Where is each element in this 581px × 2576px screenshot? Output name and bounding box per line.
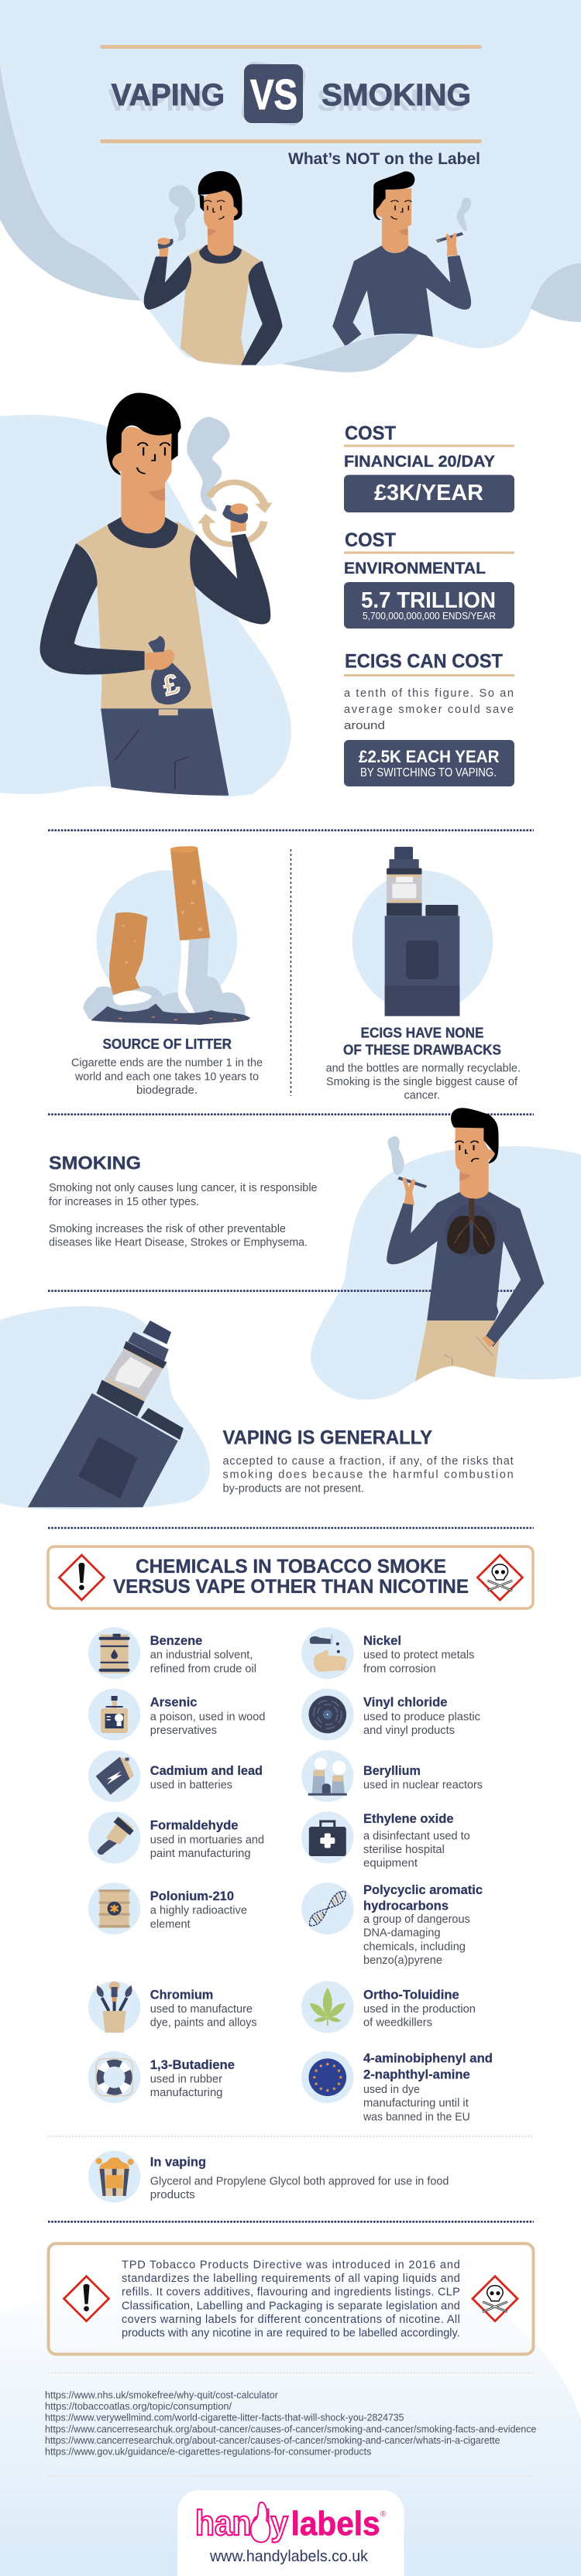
icon: skull hazard bbox=[477, 1555, 522, 1600]
text: vaping risks: by-products are not present. bbox=[223, 1482, 364, 1495]
item: 1,3-butadiene: manufacturing bbox=[150, 2087, 222, 2099]
icon: recycle arrows bbox=[198, 482, 273, 544]
text: TPD: TPD Tobacco Products Directive was introduced in 2016 and bbox=[122, 2259, 460, 2271]
item: 4-aminobiphenyl and 2-naphthyl-amine: was banned in the EU bbox=[363, 2111, 470, 2123]
cost section background bbox=[0, 415, 291, 797]
item: polycyclic aromatic hydrocarbons bbox=[301, 1882, 483, 1967]
panel: environmental cost: ENVIRONMENTAL bbox=[344, 560, 486, 577]
item: ethylene oxide bbox=[301, 1811, 470, 1870]
title: smoking: SMOKING bbox=[321, 78, 471, 112]
illustration: vape device bbox=[352, 847, 493, 1016]
item: ortho-toluidine: used in the production bbox=[363, 2003, 476, 2016]
heading: cost: COST bbox=[345, 423, 396, 444]
panel: ecigs cost: £2.5K EACH YEAR bbox=[359, 747, 499, 766]
item: in vaping: Glycerol and Propylene Glycol both approved for use in food bbox=[150, 2175, 449, 2187]
item: nickel: Nickel bbox=[363, 1633, 401, 1648]
logo: url: www.handylabels.co.uk bbox=[209, 2548, 369, 2565]
figure: smoking man bbox=[332, 171, 471, 347]
panel: chemicals banner: VERSUS VAPE OTHER THAN NICOTINE bbox=[113, 1576, 469, 1598]
item: 4-aminobiphenyl and 2-naphthyl-amine: used in dye bbox=[363, 2084, 420, 2096]
heading: ecigs can cost: ECIGS CAN COST bbox=[345, 650, 503, 672]
text: TPD: standardizes the labelling requirements of all vaping liquids and bbox=[122, 2273, 460, 2285]
text: sources: https://tobaccoatlas.org/topic/consumption/ bbox=[45, 2400, 232, 2412]
text: TPD: refills. It covers additives, flavouring and ingredients listings. CLP bbox=[122, 2287, 460, 2299]
item: vinyl chloride: and vinyl products bbox=[363, 1725, 455, 1737]
figure: man holding money bag bbox=[40, 392, 273, 796]
figure: man with damaged lungs bbox=[387, 1108, 544, 1382]
item: polycyclic aromatic hydrocarbons: DNA-damaging bbox=[363, 1927, 441, 1940]
title rule top bbox=[100, 45, 482, 49]
text: smoking risks: Smoking increases the risk of other preventable bbox=[49, 1223, 286, 1235]
text: vaping risks: smoking does because the harmful combustion bbox=[223, 1469, 514, 1482]
panel: environmental cost bbox=[344, 529, 514, 629]
text: sources: https://www.gov.uk/guidance/e-cigarettes-regulations-for-consumer-products bbox=[45, 2446, 372, 2458]
header foreground wave bbox=[282, 334, 419, 372]
panel: financial cost: FINANCIAL 20/DAY bbox=[344, 453, 495, 471]
panel: ecigs cost: BY SWITCHING TO VAPING. bbox=[360, 766, 497, 779]
item: benzene: refined from crude oil bbox=[150, 1663, 256, 1675]
text: ecigs drawbacks: Smoking is the single biggest cause of bbox=[326, 1076, 518, 1088]
item: ethylene oxide: a disinfectant used to bbox=[363, 1830, 470, 1842]
text: smoking risks: Smoking not only causes lung cancer, it is responsible bbox=[49, 1182, 318, 1194]
text: sources: https://www.verywellmind.com/world-cigarette-litter-facts-that-will-shock-you-2824735 bbox=[45, 2412, 404, 2424]
text: litter: Cigarette ends are the number 1 in the bbox=[71, 1057, 263, 1070]
item: 4-aminobiphenyl and 2-naphthyl-amine: 2-naphthyl-amine bbox=[363, 2067, 470, 2081]
subtitle: What’s NOT on the Label bbox=[288, 150, 480, 168]
item: beryllium: Beryllium bbox=[363, 1763, 421, 1778]
item: chromium: Chromium bbox=[150, 1987, 213, 2002]
logo: handy: handy bbox=[195, 2503, 288, 2543]
logo: labels: labels bbox=[291, 2505, 380, 2543]
icon: exclamation hazard small bbox=[64, 2276, 108, 2321]
figure: vaping man bbox=[144, 171, 283, 365]
logo: registered mark: ® bbox=[380, 2510, 387, 2519]
item: formaldehyde: used in mortuaries and bbox=[150, 1834, 264, 1846]
item: ortho-toluidine bbox=[301, 1982, 476, 2033]
item: benzene bbox=[88, 1627, 256, 1679]
heading: source of litter: SOURCE OF LITTER bbox=[102, 1036, 232, 1052]
title rule bottom bbox=[100, 139, 482, 143]
item: polycyclic aromatic hydrocarbons: hydrocarbons bbox=[363, 1899, 449, 1913]
text: sources: https://www.cancerresearchuk.org/about-cancer/causes-of-cancer/smoking-and-cancer/smoking-facts-and-evidence bbox=[45, 2423, 536, 2434]
item: ethylene oxide: sterilise hospital bbox=[363, 1844, 445, 1856]
illustration: cigarette butts bbox=[84, 846, 250, 1025]
item: 4-aminobiphenyl and 2-naphthyl-amine: manufacturing until it bbox=[363, 2098, 469, 2110]
item: cadmium and lead bbox=[88, 1750, 263, 1802]
icon: exclamation hazard bbox=[59, 1555, 104, 1600]
heading: smoking: SMOKING bbox=[49, 1153, 141, 1174]
item: ethylene oxide: Ethylene oxide bbox=[363, 1811, 454, 1826]
item: nickel: from corrosion bbox=[363, 1663, 436, 1675]
text: ecigs drawbacks bbox=[326, 1062, 521, 1102]
text: TPD: products with any nicotine in are required to be labelled accordingly. bbox=[122, 2328, 460, 2340]
item: benzene: Benzene bbox=[150, 1633, 202, 1648]
item: in vaping: products bbox=[150, 2189, 195, 2201]
heading: chemicals: CHEMICALS IN TOBACCO SMOKE bbox=[136, 1556, 446, 1577]
text: ecigs drawbacks: cancer. bbox=[404, 1090, 440, 1102]
text: vaping risks: accepted to cause a fraction, if any, of the risks that bbox=[223, 1455, 514, 1468]
footer gradient background bbox=[0, 2260, 581, 2576]
heading: vaping is generally: VAPING IS GENERALLY bbox=[223, 1427, 432, 1449]
illustration: tilted vape device bbox=[0, 1306, 210, 1509]
panel: financial cost: £3K/YEAR bbox=[374, 481, 483, 505]
item: 4-aminobiphenyl and 2-naphthyl-amine: 4-aminobiphenyl and bbox=[363, 2051, 493, 2066]
item: 1,3-butadiene bbox=[88, 2051, 235, 2103]
panel: TPD legislation bbox=[48, 2243, 533, 2355]
icon: skull hazard small bbox=[473, 2276, 517, 2321]
text: smoking risks: diseases like Heart Disease, Strokes or Emphysema. bbox=[49, 1237, 308, 1249]
item: arsenic: Arsenic bbox=[150, 1695, 197, 1710]
item: vinyl chloride: Vinyl chloride bbox=[363, 1695, 448, 1710]
text: sources: https://www.nhs.uk/smokefree/why-quit/cost-calculator bbox=[45, 2389, 279, 2400]
item: nickel bbox=[301, 1627, 474, 1679]
heading: ecigs have none bbox=[343, 1026, 501, 1058]
item: formaldehyde: paint manufacturing bbox=[150, 1848, 251, 1860]
text: TPD bbox=[122, 2259, 460, 2340]
item: vinyl chloride: used to produce plastic bbox=[363, 1711, 480, 1723]
text: smoking risks bbox=[49, 1182, 318, 1249]
item: arsenic: a poison, used in wood bbox=[150, 1711, 265, 1723]
text: vaping risks bbox=[223, 1455, 514, 1495]
text: TPD: covers warning labels for different concentrations of nicotine. All bbox=[122, 2314, 460, 2326]
item: polonium-210: a highly radioactive bbox=[150, 1905, 247, 1917]
item: polonium-210 bbox=[88, 1882, 247, 1934]
text: litter bbox=[71, 1057, 263, 1097]
panel: environmental cost: 5.7 TRILLION bbox=[361, 588, 496, 613]
text: litter: world and each one takes 10 years to bbox=[74, 1071, 259, 1084]
header background blobs bbox=[0, 0, 581, 366]
item: polonium-210: Polonium-210 bbox=[150, 1889, 234, 1903]
item: chromium bbox=[88, 1982, 257, 2033]
logo card bbox=[177, 2490, 404, 2576]
item: polycyclic aromatic hydrocarbons: chemicals, including bbox=[363, 1941, 466, 1953]
panel: financial cost bbox=[344, 423, 514, 512]
text: TPD: Classification, Labelling and Packaging is separate legislation and bbox=[122, 2300, 460, 2312]
item: 1,3-butadiene: used in rubber bbox=[150, 2073, 222, 2085]
panel: ecigs cost: around bbox=[344, 720, 385, 732]
item: beryllium: used in nuclear reactors bbox=[363, 1780, 483, 1792]
item: polonium-210: element bbox=[150, 1918, 191, 1930]
panel: chemicals banner bbox=[48, 1547, 533, 1608]
item: in vaping: In vaping bbox=[150, 2155, 206, 2170]
item: arsenic bbox=[88, 1689, 265, 1740]
money bag pound sign: £ bbox=[160, 667, 183, 702]
item: ethylene oxide: equipment bbox=[363, 1858, 418, 1870]
text: litter: biodegrade. bbox=[136, 1084, 198, 1097]
text: smoking risks: for increases in 15 other types. bbox=[49, 1196, 199, 1208]
panel: ecigs cost: a tenth of this figure. So an bbox=[344, 687, 514, 700]
panel: environmental cost: 5,700,000,000,000 ENDS/YEAR bbox=[363, 611, 496, 622]
item: polycyclic aromatic hydrocarbons: a group of dangerous bbox=[363, 1913, 470, 1926]
text: ecigs drawbacks: and the bottles are normally recyclable. bbox=[326, 1062, 521, 1074]
item: ortho-toluidine: Ortho-Toluidine bbox=[363, 1987, 459, 2002]
item: beryllium bbox=[301, 1750, 483, 1802]
item: benzene: an industrial solvent, bbox=[150, 1649, 253, 1662]
smoking man background bbox=[311, 1146, 581, 1399]
text: sources: https://www.cancerresearchuk.org/about-cancer/causes-of-cancer/smoking-and-cancer/whats-in-a-cigarette bbox=[45, 2434, 500, 2446]
item: cadmium and lead: Cadmium and lead bbox=[150, 1763, 263, 1778]
heading: cost environmental: COST bbox=[345, 529, 396, 551]
item: formaldehyde: Formaldehyde bbox=[150, 1818, 239, 1833]
item: formaldehyde bbox=[88, 1811, 264, 1864]
item: in vaping bbox=[88, 2150, 449, 2203]
item: nickel: used to protect metals bbox=[363, 1649, 474, 1662]
item: polycyclic aromatic hydrocarbons: benzo(a)pyrene bbox=[363, 1954, 442, 1967]
panel: ecigs cost: average smoker could save bbox=[344, 704, 514, 716]
heading: ecigs have none: ECIGS HAVE NONE bbox=[361, 1026, 483, 1041]
item: chromium: used to manufacture bbox=[150, 2003, 253, 2016]
item: vinyl chloride bbox=[301, 1689, 480, 1740]
item: polycyclic aromatic hydrocarbons: Polycyclic aromatic bbox=[363, 1882, 483, 1897]
icon: lungs bbox=[445, 1198, 497, 1256]
title: vaping: VAPING bbox=[112, 78, 225, 112]
text: sources bbox=[45, 2389, 536, 2458]
item: 4-aminobiphenyl and 2-naphthyl-amine bbox=[301, 2051, 493, 2123]
logo: thumb mark bbox=[251, 2502, 270, 2542]
title: VS badge: VS bbox=[250, 70, 297, 118]
item: 1,3-butadiene: 1,3-Butadiene bbox=[150, 2057, 235, 2072]
title: VS badge bbox=[241, 61, 306, 126]
icon: money bag bbox=[146, 635, 191, 704]
item: chromium: dye, paints and alloys bbox=[150, 2017, 257, 2030]
heading: ecigs have none: OF THESE DRAWBACKS bbox=[343, 1043, 501, 1058]
item: cadmium and lead: used in batteries bbox=[150, 1780, 232, 1792]
item: ortho-toluidine: of weedkillers bbox=[363, 2017, 432, 2030]
panel: ecigs cost bbox=[344, 650, 514, 786]
title: vaping: VAPING bbox=[108, 84, 218, 118]
title: smoking: SMOKING bbox=[317, 84, 466, 118]
item: arsenic: preservatives bbox=[150, 1725, 217, 1737]
